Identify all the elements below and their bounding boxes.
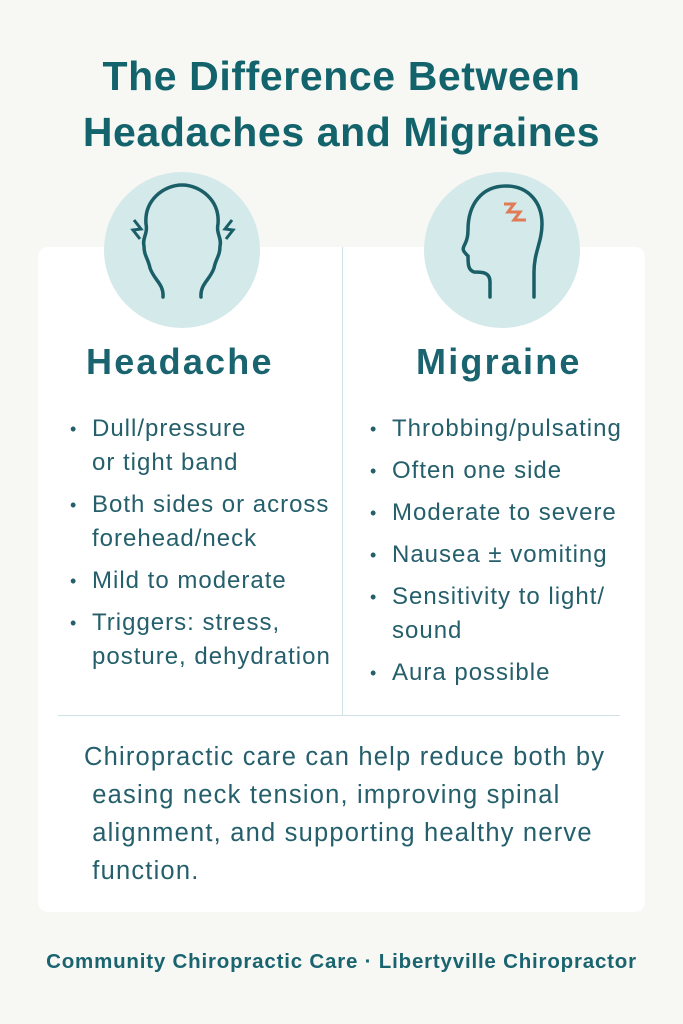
list: migraine: Aura possible — [392, 659, 550, 686]
list: headache: forehead/neck — [92, 525, 257, 552]
list: headache: posture, dehydration — [92, 643, 331, 670]
list: migraine: Moderate to severe — [392, 499, 617, 526]
list: headache — [70, 415, 331, 670]
icon: migraine head — [424, 172, 580, 328]
list: migraine: Throbbing/pulsating — [392, 415, 622, 442]
list: migraine: Often one side — [392, 457, 562, 484]
title — [83, 53, 600, 155]
list: migraine: sound — [392, 617, 462, 644]
callout text: easing neck tension, improving spinal — [92, 781, 561, 809]
card panel — [38, 247, 645, 912]
list: migraine — [370, 415, 622, 686]
heading: Headache: Headache — [86, 341, 274, 382]
list: headache: Dull/pressure — [92, 415, 246, 442]
footer: Community Chiropractic Care · Libertyville Chiropractor — [46, 950, 637, 973]
callout text: function. — [92, 857, 199, 885]
callout text: Chiropractic care can help reduce both by — [84, 743, 605, 771]
callout text — [84, 743, 605, 885]
icon: headache head — [104, 172, 260, 328]
heading: Migraine: Migraine — [416, 341, 582, 382]
list: migraine: Nausea ± vomiting — [392, 541, 608, 568]
title: The Difference Between — [102, 53, 580, 99]
list: headache: Mild to moderate — [92, 567, 287, 594]
list: headache: or tight band — [92, 449, 238, 476]
callout text: alignment, and supporting healthy nerve — [92, 819, 593, 847]
list: headache: Triggers: stress, — [92, 609, 280, 636]
list: migraine: Sensitivity to light/ — [392, 583, 605, 610]
list: headache: Both sides or across — [92, 491, 329, 518]
title: Headaches and Migraines — [83, 109, 600, 155]
